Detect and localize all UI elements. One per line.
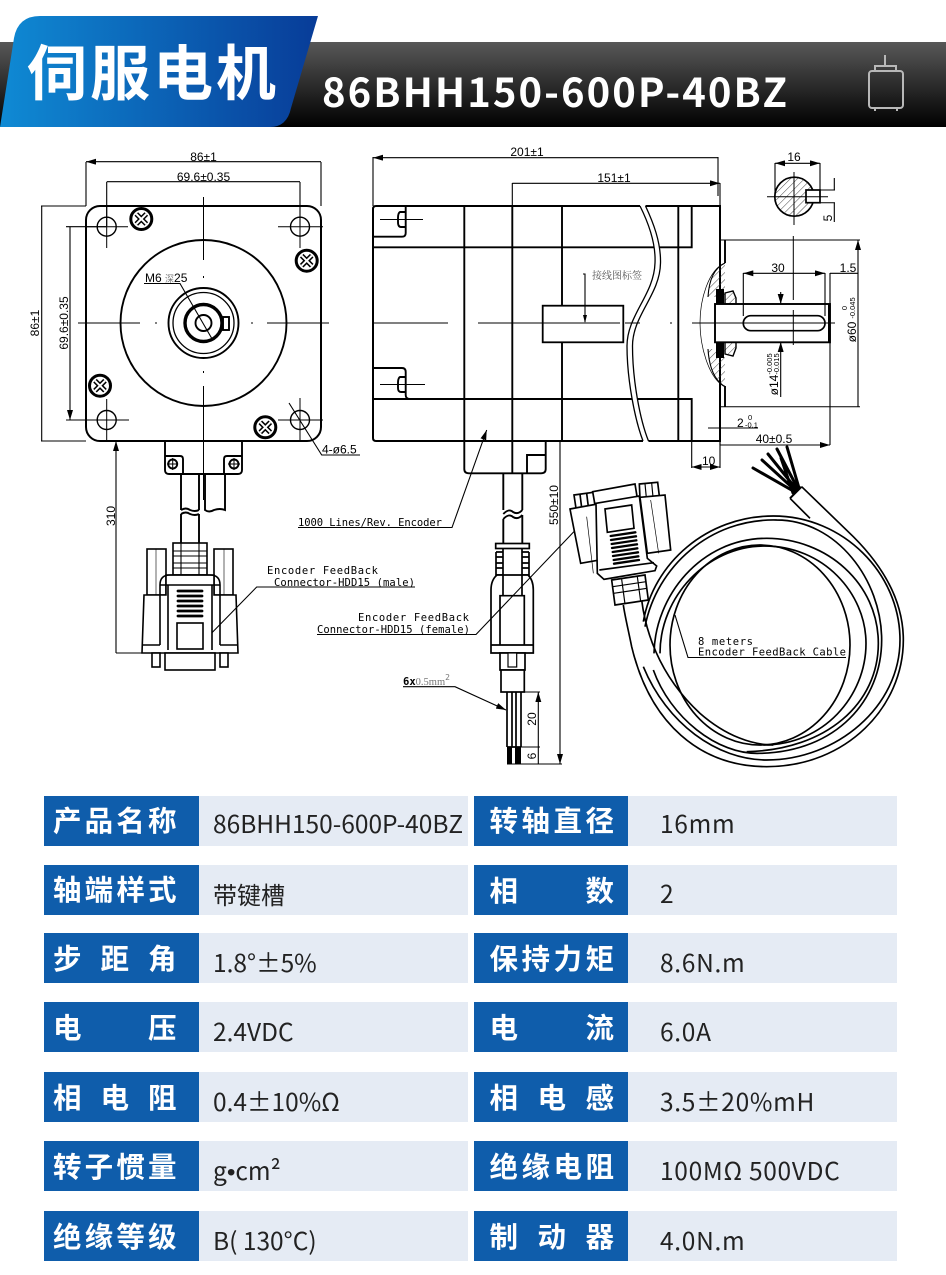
spec label: 相数: 数 [585, 869, 614, 910]
label: Encoder FeedBack female connector: Connector-HDD15 (female) [317, 624, 470, 636]
drawing: front view of motor [78, 197, 360, 456]
shaft cross-section with key: 5 [821, 214, 835, 221]
label: encoder [298, 430, 487, 529]
spec label: 相电感 [474, 1072, 628, 1122]
spec label: 绝缘等级 [44, 1211, 198, 1261]
spec label: 相电阻: 电 [100, 1076, 129, 1117]
drawing: front view of motor: M6 深25 [145, 271, 188, 285]
spec label: 产品名称: 称 [148, 799, 176, 840]
drawing: side view of motor: 接线图标签 [592, 267, 642, 282]
spec label: 保持力矩: 矩 [585, 937, 614, 978]
spec label: 相电阻: 阻 [148, 1076, 176, 1117]
spec value: product name: 86BHH150-600P-40BZ [213, 806, 463, 841]
shaft dimensions: 1.5 [840, 261, 857, 275]
front view dimensions: 86±1 [190, 150, 217, 164]
spec label: 绝缘等级: 绝 [53, 1215, 82, 1256]
spec label: 转轴直径: 径 [585, 799, 614, 840]
spec value: insulation resistance [628, 1141, 897, 1191]
front view dimensions: 86±1 [28, 309, 42, 336]
spec label: 产品名称 [44, 796, 198, 846]
spec label: 转轴直径: 转 [490, 799, 518, 840]
connector: HDD15 on coiled cable [570, 482, 671, 605]
side view dimensions [373, 145, 720, 206]
spec label: 转子惯量 [44, 1141, 198, 1191]
spec value: shaft end: 带键槽 [213, 876, 285, 911]
spec label: 轴端样式: 轴 [53, 868, 82, 909]
connector: HDD15 male [142, 543, 238, 670]
spec value: phase resistance: 0.4±10%Ω [213, 1084, 340, 1119]
drawing: front view of motor: 4-ø6.5 [322, 442, 357, 456]
spec value: rotor inertia [198, 1141, 468, 1191]
spec value: voltage: 2.4VDC [213, 1014, 294, 1049]
spec label: 转子惯量: 子 [85, 1145, 113, 1186]
icon: screws [90, 208, 317, 438]
spec value: holding torque: 8.6N.m [660, 945, 745, 980]
spec value: shaft end [198, 865, 468, 915]
spec label: 电流: 电 [490, 1006, 518, 1047]
spec label: 保持力矩: 力 [553, 937, 582, 978]
drawing: side view of motor [373, 206, 835, 441]
shaft dimensions: 0 [840, 306, 849, 310]
shaft dimensions: 10 [702, 454, 716, 468]
title: 伺服电机 [27, 26, 276, 113]
spec label: 产品名称: 品 [85, 799, 113, 840]
spec label: 转子惯量: 量 [148, 1145, 176, 1186]
side view dimensions: 201±1 [510, 145, 544, 159]
shaft dimensions: -0.1 [745, 420, 758, 430]
spec label: 轴端样式 [44, 865, 198, 915]
spec value: step angle: 1.8°±5% [213, 945, 317, 980]
label: Encoder FeedBack male connector: Encoder FeedBack [267, 565, 379, 577]
spec label: 相电阻 [44, 1072, 198, 1122]
label: 8 meters cable [675, 615, 846, 658]
spec label: 制动器: 动 [537, 1215, 566, 1256]
shaft section and flange [700, 236, 860, 407]
spec label: 电压: 电 [53, 1006, 82, 1047]
label: 8 meters cable: Encoder FeedBack Cable [698, 646, 846, 658]
label: 8 meters cable: 8 meters [698, 636, 753, 648]
front view dimensions: 69.6±0.35 [57, 296, 71, 350]
header blue tab [0, 16, 318, 127]
spec label: 绝缘等级: 级 [148, 1215, 176, 1256]
label: Encoder FeedBack female connector: Encoder FeedBack [358, 612, 470, 624]
spec label: 绝缘等级: 缘 [85, 1215, 113, 1256]
shaft dimensions [692, 240, 859, 468]
spec value: phase inductance: 3.5±20%mH [660, 1084, 815, 1119]
label: Encoder FeedBack male connector: Connector-HDD15 (male) [274, 577, 415, 589]
spec label: 相电感: 相 [490, 1076, 518, 1117]
dimensions: cable lengths: 550±10 [547, 485, 561, 525]
side view dimensions: 151±1 [597, 171, 631, 185]
spec value: current: 6.0A [660, 1014, 712, 1049]
spec value: holding torque [628, 933, 897, 983]
spec value: step angle [198, 933, 468, 983]
spec label: 电压 [44, 1002, 198, 1052]
spec label: 电压: 压 [148, 1006, 176, 1047]
spec label: 步距角 [44, 933, 198, 983]
spec value: phase inductance [628, 1072, 897, 1122]
header dark band [0, 42, 946, 127]
spec label: 保持力矩 [474, 933, 628, 983]
spec value: brake: 4.0N.m [660, 1223, 745, 1258]
icon: motor [869, 55, 903, 111]
spec label: 步距角: 步 [53, 937, 82, 978]
spec label: 步距角: 角 [148, 937, 176, 978]
shaft dimensions: 2 [737, 416, 744, 430]
shaft dimensions: -0.005 [765, 353, 774, 375]
shaft dimensions: 30 [771, 261, 785, 275]
spec label: 转子惯量: 转 [53, 1145, 82, 1186]
spec label: 步距角: 距 [100, 937, 129, 978]
spec value: phase resistance [198, 1072, 468, 1122]
spec label: 转子惯量: 惯 [116, 1145, 145, 1186]
spec label: 绝缘电阻: 阻 [585, 1145, 614, 1186]
spec value: brake [628, 1211, 897, 1261]
spec label: 制动器: 制 [490, 1215, 518, 1256]
spec value: insulation class: B( 130°C) [213, 1223, 317, 1258]
spec label: 绝缘电阻 [474, 1141, 628, 1191]
label: Encoder FeedBack female connector [317, 499, 605, 636]
spec label: 制动器: 器 [585, 1215, 614, 1256]
encoder housing and side cable [464, 441, 546, 543]
stripped wires [753, 447, 799, 493]
dimensions: cable lengths [507, 441, 562, 764]
shaft cross-section with key [767, 150, 835, 225]
label: encoder: 1000 Lines/Rev. Encoder [298, 517, 442, 529]
spec label: 相数 [474, 865, 628, 915]
spec label: 绝缘电阻: 缘 [521, 1145, 550, 1186]
spec label: 转轴直径: 直 [553, 799, 582, 840]
spec value: voltage [198, 1002, 468, 1052]
spec label: 相电感: 感 [585, 1076, 614, 1117]
spec value: phases [628, 865, 897, 915]
shaft dimensions: -0.015 [772, 353, 781, 375]
connector: HDD15 female side view [491, 544, 533, 764]
spec label: 轴端样式: 式 [148, 868, 176, 909]
label: wire gauge: 2 [445, 673, 450, 682]
spec label: 相数: 相 [490, 869, 518, 910]
spec value: shaft diameter: 16mm [660, 806, 735, 841]
model number: 86BHH150-600P-40BZ [322, 61, 787, 119]
spec label: 电流 [474, 1002, 628, 1052]
spec label: 绝缘等级: 等 [116, 1215, 145, 1256]
spec value: current [628, 1002, 897, 1052]
spec value: rotor inertia: g•cm² [213, 1153, 281, 1188]
front view dimensions [28, 150, 321, 441]
label: wire gauge: 6x0.5mm [403, 676, 445, 688]
front view dimensions: 69.6±0.35 [177, 170, 230, 184]
spec label: 制动器 [474, 1211, 628, 1261]
shaft dimensions: -0.045 [848, 297, 857, 319]
shaft dimensions: ø60 [845, 321, 859, 342]
dimension: 310: 310 [104, 506, 118, 526]
shaft dimensions: 0 [748, 413, 752, 422]
spec label: 轴端样式: 端 [85, 868, 113, 909]
spec label: 转轴直径: 轴 [521, 799, 550, 840]
spec label: 轴端样式: 样 [116, 868, 145, 909]
dimensions: cable lengths: 20 [525, 712, 539, 726]
spec label: 相电感: 电 [537, 1076, 566, 1117]
spec label: 保持力矩: 持 [521, 937, 550, 978]
shaft dimensions: ø14 [767, 374, 781, 395]
spec label: 产品名称: 名 [116, 799, 145, 840]
spec value: insulation class [198, 1211, 468, 1261]
spec label: 绝缘电阻: 绝 [490, 1145, 518, 1186]
dimensions: cable lengths: 6 [525, 752, 539, 759]
spec value: product name [198, 796, 468, 846]
shaft dimensions: 40±0.5 [756, 432, 793, 446]
coiled encoder cable [623, 487, 903, 767]
spec label: 电流: 流 [585, 1006, 614, 1047]
spec label: 绝缘电阻: 电 [553, 1145, 582, 1186]
spec value: shaft diameter [628, 796, 897, 846]
spec label: 转轴直径 [474, 796, 628, 846]
shaft cross-section with key: 16 [787, 150, 801, 164]
spec value: insulation resistance: 100MΩ 500VDC [660, 1153, 841, 1188]
spec value: phases: 2 [660, 876, 674, 911]
front view encoder mount and cables [165, 441, 242, 543]
spec label: 相电阻: 相 [53, 1076, 82, 1117]
label: Encoder FeedBack male connector [212, 565, 415, 633]
label: wire gauge [403, 673, 506, 710]
spec label: 产品名称: 产 [53, 799, 82, 840]
spec label: 保持力矩: 保 [490, 937, 518, 978]
